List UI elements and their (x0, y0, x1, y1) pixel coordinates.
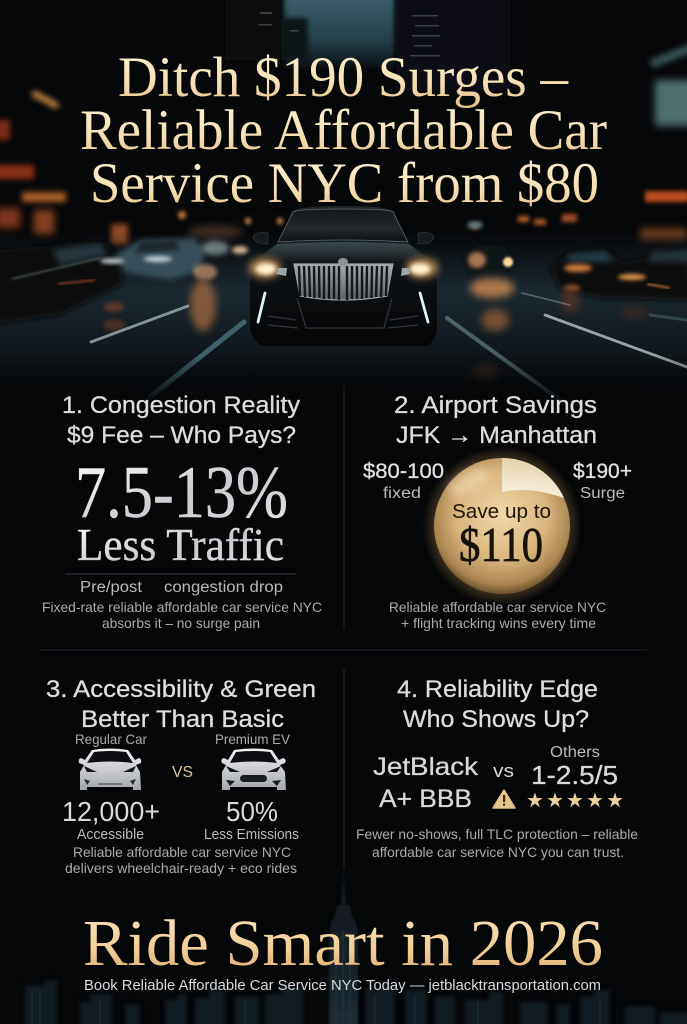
jetblack rating: JetBlack (373, 753, 479, 781)
stats (62, 796, 299, 843)
vs label: VS (172, 764, 193, 781)
jetblack rating (373, 753, 479, 813)
heading: congestion: 1. Congestion Reality (62, 392, 300, 419)
panel: reliability edge (356, 676, 638, 860)
surge price (573, 460, 632, 502)
caption: reliability: affordable car service NYC you can trust. (372, 844, 624, 860)
lane lines (91, 293, 687, 400)
caption: congestion: absorbs it – no surge pain (102, 615, 260, 631)
panel: accessibility and green (46, 676, 316, 876)
title: Ditch $190 Surges – (118, 46, 568, 109)
panel: congestion reality (42, 392, 322, 631)
icon: premium ev (221, 748, 286, 790)
caption: accessibility: Reliable affordable car service NYC (73, 844, 291, 860)
others rating (531, 744, 618, 790)
others rating: Others (550, 744, 600, 761)
icon: warning triangle (493, 790, 515, 808)
title: Reliable Affordable Car (80, 99, 607, 162)
heading: accessibility: 3. Accessibility & Green (46, 676, 316, 703)
surge price: $190+ (573, 460, 632, 483)
heading: reliability (397, 676, 598, 733)
big stat: traffic drop: Less Traffic (77, 519, 284, 570)
traffic cars left (0, 238, 248, 324)
vs label: vs (493, 761, 514, 781)
grille (294, 264, 393, 300)
caption: reliability (356, 826, 638, 860)
column labels: Regular Car (75, 731, 147, 747)
fixed price (363, 460, 444, 502)
caption: congestion (42, 599, 322, 631)
caption: airport: + flight tracking wins every time (401, 615, 596, 631)
hero car (249, 206, 438, 346)
savings pie sphere: Save up to (452, 501, 551, 523)
traffic cars right (462, 245, 687, 300)
column labels: Premium EV (215, 731, 291, 747)
stats: Less Emissions (204, 827, 299, 843)
caption: airport: Reliable affordable car service NYC (389, 599, 606, 615)
surge price: Surge (580, 485, 625, 502)
heading: accessibility: Better Than Basic (81, 706, 284, 733)
stats: Accessible (77, 827, 144, 843)
column labels (75, 731, 291, 747)
heading: congestion: $9 Fee – Who Pays? (67, 422, 296, 449)
stat labels: Pre/post (80, 579, 143, 596)
heading: airport (394, 392, 597, 449)
big stat: traffic drop (75, 452, 288, 570)
fixed price: fixed (383, 485, 421, 502)
jetblack rating: A+ BBB (379, 785, 472, 813)
fixed price: $80-100 (363, 460, 444, 483)
title (80, 46, 607, 215)
caption: congestion: Fixed-rate reliable affordable car service NYC (42, 599, 322, 615)
dividers (40, 385, 647, 870)
heading: reliability: 4. Reliability Edge (397, 676, 598, 703)
caption: accessibility (65, 844, 297, 876)
windshield (278, 209, 408, 242)
stat labels: congestion drop (164, 579, 283, 596)
panel: airport savings (363, 392, 632, 631)
footer call to action: Book Reliable Affordable Car Service NYC Today — jetblacktransportation.com (84, 977, 601, 994)
stat labels (80, 579, 283, 596)
savings pie sphere (422, 446, 582, 606)
wet road reflections (103, 264, 649, 380)
savings pie sphere: $110 (459, 517, 543, 572)
heading: airport: JFK → Manhattan (396, 422, 597, 449)
icon: five stars: ★★★★★ (526, 788, 624, 812)
footer skyline (25, 868, 687, 1024)
hood (262, 242, 424, 262)
heading: accessibility (46, 676, 316, 733)
headlights (249, 258, 438, 278)
heading: airport: 2. Airport Savings (394, 392, 597, 419)
big stat: traffic drop: 7.5-13% (75, 452, 288, 534)
footer headline: Ride Smart in 2026 (83, 907, 603, 980)
caption: airport (389, 599, 606, 631)
caption: accessibility: delivers wheelchair-ready + eco rides (65, 860, 297, 876)
heading: reliability: Who Shows Up? (403, 706, 589, 733)
others rating: 1-2.5/5 (531, 760, 618, 790)
stats: 50% (226, 796, 278, 827)
hero: city street scene (0, 0, 687, 405)
caption: reliability: Fewer no-shows, full TLC protection – reliable (356, 826, 638, 842)
icon: regular car (79, 748, 141, 790)
heading: congestion (62, 392, 300, 449)
title: Service NYC from $80 (90, 152, 599, 215)
stats: 12,000+ (62, 796, 160, 827)
